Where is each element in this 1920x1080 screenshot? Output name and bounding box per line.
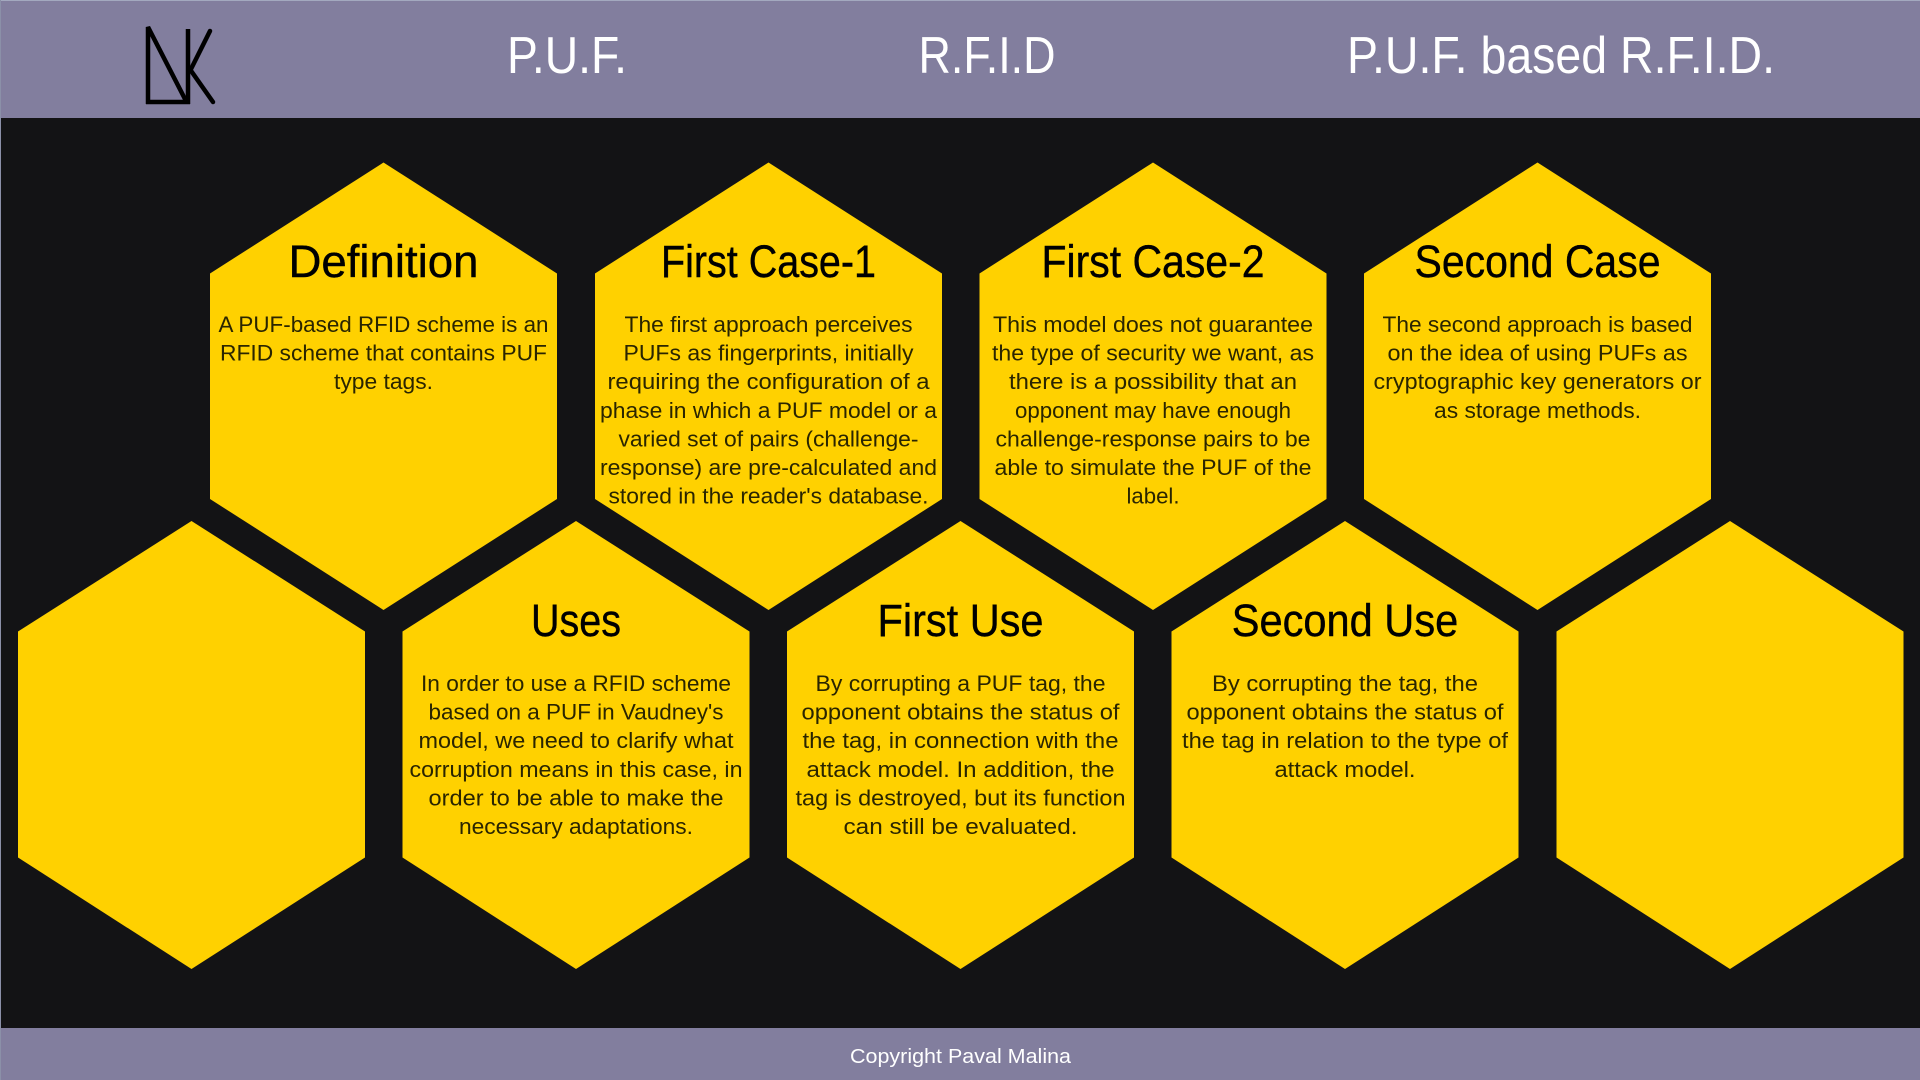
- text: Second Use body: the tag in relation to the type of: [1182, 728, 1509, 753]
- text: First Use body: attack model. In addition, the: [806, 757, 1114, 782]
- icon: NK logo: [146, 27, 213, 104]
- text: Uses body: based on a PUF in Vaudney's: [428, 700, 724, 725]
- panel: Second Use hexagon: [1172, 521, 1518, 969]
- panel: empty right hexagon: [1556, 521, 1904, 969]
- text: Second Use body: By corrupting the tag, the: [1212, 671, 1478, 696]
- text: First Case-1 body: stored in the reader's database.: [608, 484, 928, 509]
- header bar: [0, 0, 1920, 118]
- text: First Case-2 body: This model does not guarantee: [993, 312, 1313, 337]
- panel: empty left hexagon: [18, 521, 365, 969]
- panel: First Case-2 hexagon: [980, 162, 1326, 610]
- panel: First Use hexagon: [787, 521, 1134, 969]
- text: First Case-1 body: The first approach perceives: [624, 312, 912, 337]
- text: First Case-2 body: challenge-response pairs to be: [996, 426, 1310, 451]
- text: Uses body: model, we need to clarify what: [418, 728, 734, 753]
- text: First Case-2 body: label.: [1126, 484, 1180, 509]
- text: First Case-1 body: PUFs as fingerprints, initially: [624, 341, 914, 366]
- footer text: copyright: Copyright Paval Malina: [850, 1045, 1072, 1068]
- text: First Case-1 body: phase in which a PUF model or a: [600, 398, 938, 423]
- text: Uses body: In order to use a RFID scheme: [421, 671, 731, 696]
- heading: First Case-2: First Case-2: [1042, 236, 1264, 287]
- text: Uses body: corruption means in this case, in: [410, 757, 742, 782]
- text: Second Use body: opponent obtains the status of: [1186, 700, 1504, 725]
- panel: Definition hexagon: [210, 162, 557, 610]
- heading: Definition: Definition: [288, 236, 478, 287]
- text: Second Case body: [1374, 312, 1702, 423]
- text: Definition body: type tags.: [334, 369, 433, 394]
- text: Second Case body: as storage methods.: [1434, 398, 1641, 423]
- text: First Case-1 body: requiring the configuration of a: [608, 369, 930, 394]
- heading: Second Use: Second Use: [1232, 595, 1458, 646]
- text: First Case-2 body: [992, 312, 1314, 509]
- text: First Use body: tag is destroyed, but its function: [796, 785, 1126, 810]
- text: First Case-2 body: the type of security we want, as: [992, 341, 1314, 366]
- heading: First Case-1: First Case-1: [661, 236, 876, 287]
- text: Second Use body: attack model.: [1274, 757, 1416, 782]
- panel: Uses hexagon: [402, 521, 750, 969]
- text: First Case-1 body: varied set of pairs (challenge-: [618, 426, 918, 451]
- heading: Second Case: Second Case: [1414, 236, 1660, 287]
- text: First Case-2 body: opponent may have enough: [1015, 398, 1291, 423]
- heading: Uses: Uses: [531, 595, 621, 646]
- nav item: P.U.F. based R.F.I.D.: P.U.F. based R.F.I.D.: [1347, 27, 1775, 85]
- heading: First Use: First Use: [878, 595, 1044, 646]
- panel: First Case-1 hexagon: [595, 162, 942, 610]
- panel: Second Case hexagon: [1364, 162, 1711, 610]
- text: Second Case body: The second approach is based: [1382, 312, 1692, 337]
- text: First Use body: [796, 671, 1126, 839]
- text: First Case-2 body: there is a possibility that an: [1009, 369, 1297, 394]
- text: First Use body: opponent obtains the status of: [802, 700, 1120, 725]
- text: Second Case body: cryptographic key generators or: [1374, 369, 1702, 394]
- text: First Use body: By corrupting a PUF tag, the: [816, 671, 1106, 696]
- text: Definition body: A PUF-based RFID scheme is an: [218, 312, 548, 337]
- text: Uses body: necessary adaptations.: [459, 814, 693, 839]
- nav item: R.F.I.D: R.F.I.D: [918, 27, 1056, 85]
- nav item: P.U.F.: P.U.F.: [507, 27, 627, 85]
- text: Uses body: [410, 671, 742, 839]
- text: First Case-1 body: [600, 312, 938, 509]
- text: Uses body: order to be able to make the: [428, 785, 724, 810]
- text: Definition body: [218, 312, 548, 394]
- text: First Case-2 body: able to simulate the PUF of the: [994, 455, 1312, 480]
- text: First Use body: the tag, in connection with the: [802, 728, 1118, 753]
- text: Second Use body: [1182, 671, 1509, 782]
- text: Second Case body: on the idea of using PUFs as: [1388, 341, 1688, 366]
- text: First Case-1 body: response) are pre-calculated and: [600, 455, 937, 480]
- footer bar: [0, 1028, 1920, 1080]
- text: First Use body: can still be evaluated.: [844, 814, 1078, 839]
- text: Definition body: RFID scheme that contains PUF: [220, 341, 547, 366]
